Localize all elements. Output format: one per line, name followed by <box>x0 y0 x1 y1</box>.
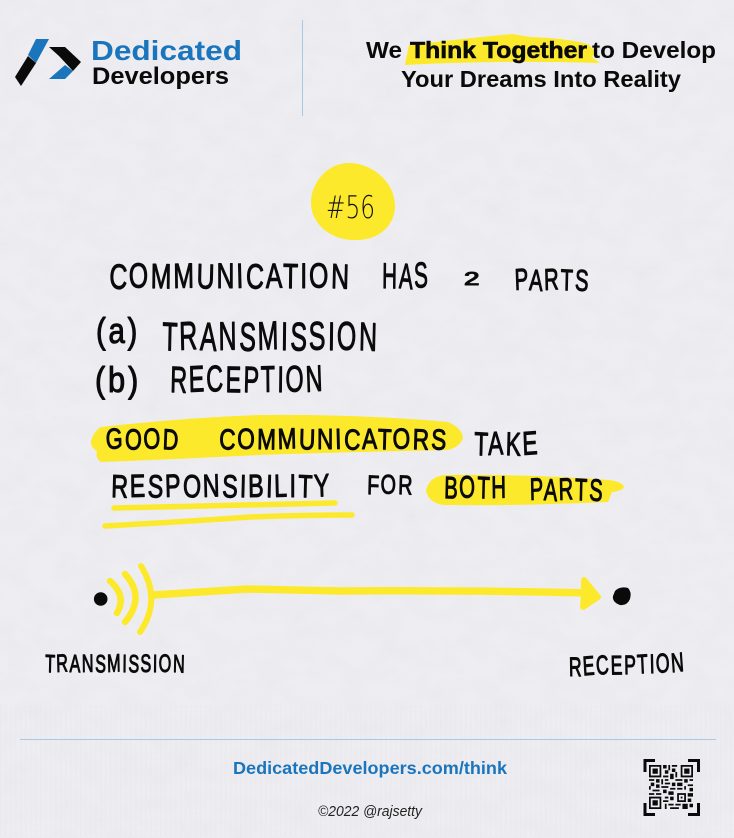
tagline line 1: We <box>366 37 402 63</box>
receiver dot <box>613 587 631 605</box>
list item b: reception: (b) <box>95 359 141 400</box>
logo wordmark: Developers: Developers <box>92 63 229 90</box>
statement: responsibility for both parts: RESPONSIBILITY <box>111 467 332 505</box>
logo wordmark: Dedicated: Dedicated <box>91 35 242 66</box>
brush highlight behind Think Together <box>405 34 600 65</box>
list item b: reception <box>95 358 325 401</box>
list item b: reception: RECEPTION <box>170 358 325 401</box>
signal waves <box>110 566 151 632</box>
qr corner brackets <box>645 760 698 814</box>
list item a: transmission: TRANSMISSION <box>162 314 380 360</box>
qr modules <box>649 765 693 809</box>
heading: communication has 2 parts: HAS <box>382 254 430 297</box>
statement: good communicators take: GOOD <box>105 423 181 457</box>
heading: communication has 2 parts: COMMUNICATION <box>109 256 352 297</box>
statement: responsibility for both parts: PARTS <box>529 471 606 508</box>
list item a: transmission: (a) <box>96 310 140 351</box>
label: reception: RECEPTION <box>568 647 686 682</box>
logo <box>15 35 242 90</box>
statement: responsibility for both parts: FOR <box>367 469 415 501</box>
diagram: transmission to reception <box>45 566 686 682</box>
statement: good communicators take: COMMUNICATORS <box>219 423 449 457</box>
arrow <box>153 580 598 607</box>
highlight: both parts <box>426 475 624 505</box>
heading: communication has 2 parts <box>109 254 592 298</box>
transmitter dot <box>94 592 107 606</box>
tagline <box>366 34 716 92</box>
statement: good communicators take <box>105 423 540 463</box>
tagline line 2: Your Dreams Into Reality <box>401 66 681 92</box>
tagline line 1: to Develop <box>592 37 716 63</box>
tagline line 1: Think Together <box>410 37 587 63</box>
heading: communication has 2 parts: PARTS <box>514 263 592 298</box>
footer url: DedicatedDevelopers.com/think <box>233 758 507 778</box>
badge: #56: #56 <box>326 190 375 226</box>
heading: communication has 2 parts: 2 <box>464 269 482 289</box>
statement: responsibility for both parts: BOTH <box>444 469 508 506</box>
underlines under responsibility <box>105 503 352 526</box>
icon: logo mark <box>15 39 81 86</box>
badge: #56 <box>311 163 395 240</box>
statement: responsibility for both parts <box>111 467 606 508</box>
label: transmission: TRANSMISSION <box>45 649 187 678</box>
copyright: ©2022 @rajsetty <box>318 804 423 820</box>
highlight: good communicators <box>91 415 463 462</box>
qr code <box>645 760 698 814</box>
list item a: transmission <box>96 310 380 360</box>
statement: good communicators take: TAKE <box>474 424 540 463</box>
